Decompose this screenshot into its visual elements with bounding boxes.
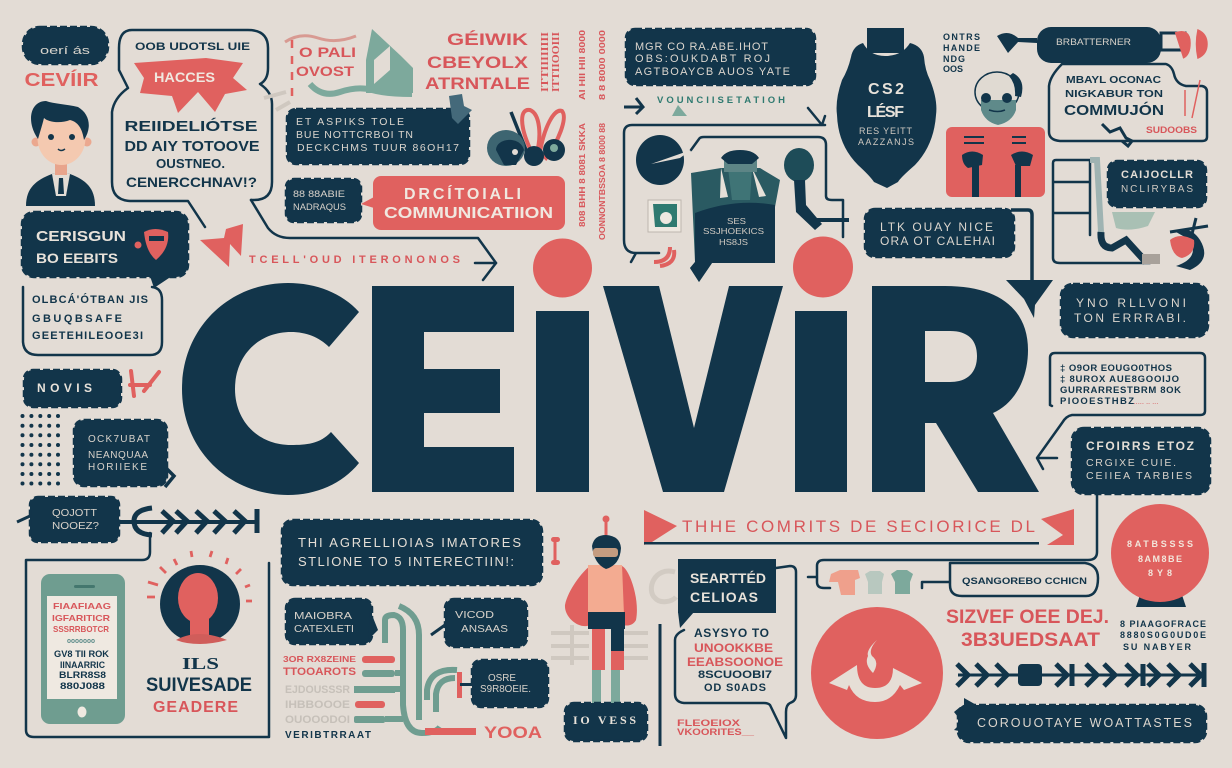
text: O PALI OVOST: OVOST: [296, 63, 355, 79]
shield badge: CS2 LESF: [837, 28, 936, 188]
panel: outlined text list: [23, 287, 162, 355]
icon: phone with list: IGFARITICR: [52, 613, 110, 623]
panel: DIGITOIAL COMMUNICATION: [361, 176, 565, 230]
callout: LTK OUAY with arrow: ORA OT CALEHAI: [880, 234, 995, 248]
icon: phone with list: GV8 TII ROK: [54, 649, 110, 659]
panel: COMMUJON outline box: SUDOOBS: [1146, 125, 1197, 135]
callout: VICOD ANSAAS: [431, 599, 527, 647]
panel: outlined text with pointer: ..... .. ...: [1134, 400, 1159, 406]
icon: coral bow triangles: [200, 224, 243, 267]
dot grid: [20, 414, 60, 486]
heading: ILS SUIVESADE GEADERE: GEADERE: [153, 699, 238, 716]
label: VOUNCIISETATIOH with arrow: VOUNCIISETATIOH: [657, 95, 785, 106]
squiggle coral: [654, 247, 674, 266]
callout: MAIOBRA: CATEXLETI: [294, 624, 354, 635]
panel: DIGITOIAL COMMUNICATION: DRCÍTOIALI: [404, 184, 521, 203]
callout: OCR block: OCK7UBAT: [88, 434, 150, 445]
text: FLEOEIOX: [677, 718, 755, 737]
label: TCELLOUD ITERONONOS: TCELL'OUD ITERONONOS: [249, 254, 460, 266]
tag: BRBATTERNER pill: [997, 27, 1207, 63]
ribbon banner: THE COMRITS: THHE COMRITS DE SECIORICE DL: [682, 517, 1035, 536]
callout: top centre text blob: AGTBOAYCB AUOS YATE: [635, 66, 790, 78]
figure and speech bubble: SES: [727, 216, 746, 226]
callout: CAIJOCLLR: CAIJOCLLR: [1121, 169, 1193, 181]
shield badge: CS2 LESF: LÉSF: [867, 102, 904, 121]
callout: LTK OUAY with arrow: LTK OUAY NICE: [880, 220, 993, 234]
icon: coral head: [144, 229, 168, 260]
callout: top-left blob: oerí ás: [40, 45, 91, 57]
callout: top centre text blob: OBS:OUKDABT ROJ: [635, 53, 770, 65]
callout: YNO RLLVONI: TON ERRRABI.: [1074, 311, 1186, 325]
badge: coral globe: 8ATBSSSS: [1127, 539, 1193, 549]
heading: GEIWIK CBEYOLX ATRNTALE: CBEYOLX: [427, 53, 529, 72]
grey squiggle: [651, 571, 676, 602]
callout: CFOIRRS ETOZ: CRGIXE CUIE.: [1086, 457, 1176, 469]
arrow: coral: [130, 371, 159, 396]
callout: COROUOTAYE WOATTASTES: COROUOTAYE WOATTASTES: [977, 716, 1192, 730]
badge: coral globe: 8AM8BE: [1138, 554, 1182, 564]
panel: outlined text with pointer: GURRARRESTBRM 8OK: [1060, 385, 1181, 396]
callout: ET ASPIKS TOLE: BUE NOTTCRBOI TN: [296, 129, 413, 141]
callout: LTK OUAY with arrow: [865, 209, 1053, 318]
callout: small blob: 88 88ABIE: [293, 189, 345, 199]
label: VOUNCIISETATIOH with arrow: [624, 95, 785, 116]
callout: CAIJOCLLR: [1108, 161, 1206, 207]
pipes: [385, 606, 457, 733]
icon: small picture: [648, 200, 681, 232]
callout: QOJOTT: NOOEZ?: [52, 521, 99, 532]
ribbon: HACCES: HACCES: [154, 69, 215, 85]
callout: SEARTTED box with bubble: [675, 559, 796, 738]
panel: outlined text with pointer: ‡ 8UROX AUE8GOOIJO: [1060, 374, 1179, 385]
bubble body text: REIIDELIÓTSE: [124, 117, 258, 135]
callout: MAIOBRA: [286, 599, 378, 644]
callout: OCR block: HORIIEKE: [88, 462, 147, 473]
callout: CERISGUN: [22, 212, 188, 288]
vertical coral text column: AI HII HII 8000: [578, 29, 587, 100]
callout: VICOD ANSAAS: ANSAAS: [461, 624, 508, 635]
bubble body text: [124, 117, 260, 190]
graphic: teal building with waves: [264, 29, 413, 110]
figure and speech bubble: HS8JS: [719, 237, 748, 247]
ribbon: HACCES: [134, 58, 247, 113]
heading: GEIWIK CBEYOLX ATRNTALE: [425, 30, 530, 93]
callout: top centre text blob: [626, 29, 815, 85]
callout: CFOIRRS ETOZ: [1072, 428, 1210, 494]
icon: microphone: [784, 148, 849, 230]
connector with small icons: [808, 495, 1098, 596]
label: YOOA: YOOA: [484, 723, 542, 742]
panel: COMMUJON outline box: COMMUJÓN: [1064, 101, 1164, 119]
shield badge: CS2 LESF: RES YEITT: [859, 126, 912, 136]
bubble text: UNOOKKBE: [694, 641, 773, 655]
icon: navy circle: [636, 135, 691, 185]
bubble text: OD S0ADS: [704, 682, 766, 694]
bubble body text: OUSTNEO.: [156, 156, 225, 171]
letter E: [372, 286, 514, 492]
ribbon banner: THE COMRITS: [644, 509, 1074, 545]
title dot left: [533, 238, 592, 298]
text: right list: SU NABYER: [1123, 642, 1192, 652]
callout: small blob: NADRAQUS: [293, 202, 346, 212]
callout: SEARTTED box with bubble: CELIOAS: [690, 589, 758, 605]
tag: NOVIS: [24, 370, 121, 407]
text: right list: 8 PIAAGOFRACE: [1120, 619, 1206, 629]
bubble heading: OOB UDOTSL UIE: [135, 41, 250, 53]
panel: COMMUJON outline box: NIGKABUR TON: [1065, 89, 1163, 100]
text: right list: 8880S0G0UD0E: [1120, 630, 1206, 640]
vertical coral text column: 8 8 8000 0000: [598, 29, 607, 100]
callout: CERISGUN: BO EEBITS: [36, 250, 118, 266]
bubble body text: DD AIY TOTOOVE: [124, 138, 260, 155]
icon: phone with list: BLRR8S8: [59, 670, 106, 680]
letter R: [872, 286, 1039, 492]
title dot right: [793, 236, 853, 298]
heading: GEIWIK CBEYOLX ATRNTALE: ATRNTALE: [425, 74, 530, 93]
panel: shelf scene: [1053, 160, 1208, 270]
tag: NOVIS: NOVIS: [37, 381, 92, 395]
letter I second: [795, 311, 847, 492]
letter V: [603, 286, 783, 492]
panel: DIGITOIAL COMMUNICATION: COMMUNICATIION: [384, 205, 553, 222]
heading: ILS SUIVESADE GEADERE: ILS: [182, 654, 219, 673]
icon: big coral circle with arrows: [811, 607, 943, 739]
shield badge: CS2 LESF: CS2: [868, 81, 904, 98]
panel: COMMUJON outline box: MBAYL OCONAC: [1066, 75, 1161, 86]
heading: CEVIIR: CEVÍIR: [24, 69, 98, 90]
list labels: TTOOAROTS: [283, 666, 356, 678]
panel: outlined text with pointer: PIOOESTHBZ: [1060, 396, 1134, 407]
callout: ET ASPIKS TOLE: [287, 94, 472, 164]
callout: CAIJOCLLR: NCLIRYBAS: [1121, 184, 1193, 195]
heading: SIZVEF: [946, 607, 1109, 651]
callout: ET ASPIKS TOLE: ET ASPIKS TOLE: [296, 116, 404, 128]
callout: OSRE: S9R8OEIE.: [480, 684, 531, 695]
callout: VICOD ANSAAS: VICOD: [455, 610, 494, 621]
icon: standing figure: [551, 516, 648, 703]
tag: IO VESS: [565, 703, 647, 741]
icon: phone with list: ooooooo: [67, 638, 95, 645]
bubble text: ASYSYO TO: [694, 626, 769, 640]
text: ONTRS HANDE: NDG: [943, 54, 965, 64]
bubble text: EEABSOONOE: [687, 655, 783, 669]
heading: SIZVEF: SIZVEF OEE DEJ.: [946, 607, 1109, 628]
text: ONTRS HANDE: HANDE: [943, 43, 980, 53]
callout: CFOIRRS ETOZ: CEIIEA TARBIES: [1086, 470, 1192, 482]
panel: character with connectors: [624, 108, 849, 282]
icon: phone with list: 880J088: [60, 681, 105, 691]
callout: ET ASPIKS TOLE: DECKCHMS TUUR 86OH17: [297, 142, 459, 154]
panel: outlined text list: GBUQBSAFE: [32, 313, 122, 325]
icon: phone with list: IINAARRIC: [60, 660, 105, 670]
callout: CERISGUN: CERISGUN: [36, 228, 126, 245]
callout: THI AGRELLIOIAS: [282, 520, 542, 585]
list labels: 3OR RX8ZEINE: [283, 654, 356, 664]
panel: COMMUJON outline box: [1049, 64, 1207, 146]
shield badge: CS2 LESF: AAZZANJS: [858, 137, 914, 147]
panel: outlined text list: OLBCÁ'ÓTBAN JIS: [32, 293, 148, 306]
arrow: chevron line left: [120, 508, 257, 535]
icon: man in suit: [26, 101, 95, 206]
text: ONTRS HANDE: [943, 32, 980, 74]
list labels: EJDOUSSSR: [285, 684, 350, 696]
text: right list: [1120, 619, 1206, 652]
text: ONTRS HANDE: OOS: [943, 64, 963, 74]
callout: OSRE: [457, 660, 548, 707]
icon: phone with list: SSSRRBOTCR: [53, 624, 109, 634]
icon: head portrait with rays: [147, 551, 252, 644]
callout: SEARTTED box with bubble: SEARTTÉD: [690, 570, 766, 586]
callout: CFOIRRS ETOZ: CFOIRRS ETOZ: [1086, 439, 1194, 453]
icon: person holding sign: [946, 72, 1045, 197]
chart: pipe list: [283, 606, 542, 742]
panel: outlined text list: GEETEHILEOOE3I: [32, 330, 143, 342]
panel: large speech bubble: [112, 30, 496, 280]
panel: outlined text with pointer: ‡ O9OR EOUGO0THOS: [1060, 363, 1172, 374]
callout: MAIOBRA: MAIOBRA: [294, 611, 352, 622]
bars: [362, 656, 395, 663]
heading: ILS SUIVESADE GEADERE: [146, 654, 252, 716]
callout: small blob: [286, 179, 361, 222]
callout: THI AGRELLIOIAS: STLIONE TO 5 INTERECTIIN!:: [298, 554, 514, 569]
callout: THI AGRELLIOIAS: THI AGRELLIOIAS IMATORES: [298, 535, 521, 550]
text: O PALI OVOST: O PALI: [299, 44, 356, 60]
vertical coral text column: ITTIIIIIIII: [540, 32, 551, 92]
badge: coral globe: [1111, 504, 1209, 607]
icon: plant cluster: [1112, 212, 1155, 230]
letter C: [182, 283, 359, 495]
callout: COROUOTAYE WOATTASTES: [954, 698, 1206, 742]
vertical coral text column: 808 BHH 8 8081 SKKA: [578, 123, 587, 227]
panel: outlined text with pointer: [1037, 353, 1205, 469]
callout: YNO RLLVONI: [1061, 284, 1208, 337]
icon: phone with list: [41, 574, 125, 724]
icon: phone with list: FIAAFIAAG: [53, 601, 111, 611]
vertical coral text column: ITTIIOOIII: [551, 32, 562, 92]
list labels: OUOOODOI: [285, 714, 350, 726]
list labels: IHBBOOOE: [285, 699, 350, 711]
arrow: chevron line right: [957, 663, 1205, 687]
letter I: [536, 311, 589, 492]
callout: OCR block: NEANQUAA: [88, 450, 148, 461]
bubble text: 8SCUOOBI7: [698, 669, 772, 681]
figure and speech bubble: SSJHOEKICS: [703, 226, 764, 236]
tag: IO VESS: IO VESS: [573, 713, 636, 727]
connector with small icons: QSANGOREBO CCHICN: [962, 576, 1087, 586]
callout: OCR block: [74, 420, 174, 487]
divider line: [658, 624, 662, 746]
heading: ILS SUIVESADE GEADERE: SUIVESADE: [146, 675, 252, 696]
callout: top centre text blob: MGR CO RA.ABE.IHOT: [635, 41, 768, 53]
text: FLEOEIOX: FLEOEIOX: [677, 718, 740, 728]
bubble body text: CENERCCHNAV!?: [126, 174, 257, 190]
vertical coral text column: OONNONTBSSOA 8 8000 88: [598, 122, 607, 240]
panel: mobile frame: [26, 533, 269, 737]
icon: abstract rabbit ears: [487, 110, 565, 166]
vertical coral text column: [540, 29, 607, 240]
heading: SIZVEF: 3B3UEDSAAT: [961, 630, 1100, 651]
tag: BRBATTERNER pill: BRBATTERNER: [1056, 37, 1132, 47]
main title: CEIVIR: [182, 283, 1039, 495]
callout: YNO RLLVONI: YNO RLLVONI: [1076, 296, 1186, 310]
heading: GEIWIK CBEYOLX ATRNTALE: GÉIWIK: [447, 30, 529, 49]
text: ONTRS HANDE: ONTRS: [943, 32, 980, 42]
text: O PALI OVOST: [296, 44, 356, 79]
badge: coral globe: 8Y8: [1148, 568, 1172, 578]
list labels: VERIBTRRAAT: [285, 730, 371, 741]
icon: coral dumbbell: [551, 537, 560, 565]
callout: top-left blob: [23, 27, 108, 64]
callout: OSRE: OSRE: [488, 673, 516, 684]
callout: QOJOTT: QOJOTT: [52, 508, 97, 519]
bubble text: [687, 626, 783, 694]
figure and speech bubble: [690, 150, 780, 282]
callout: QOJOTT: [17, 497, 119, 542]
small figures: [829, 570, 913, 595]
text: FLEOEIOX: VKOORITES__: [677, 727, 755, 737]
list labels: [283, 654, 371, 741]
figure at corner: [1170, 218, 1208, 270]
